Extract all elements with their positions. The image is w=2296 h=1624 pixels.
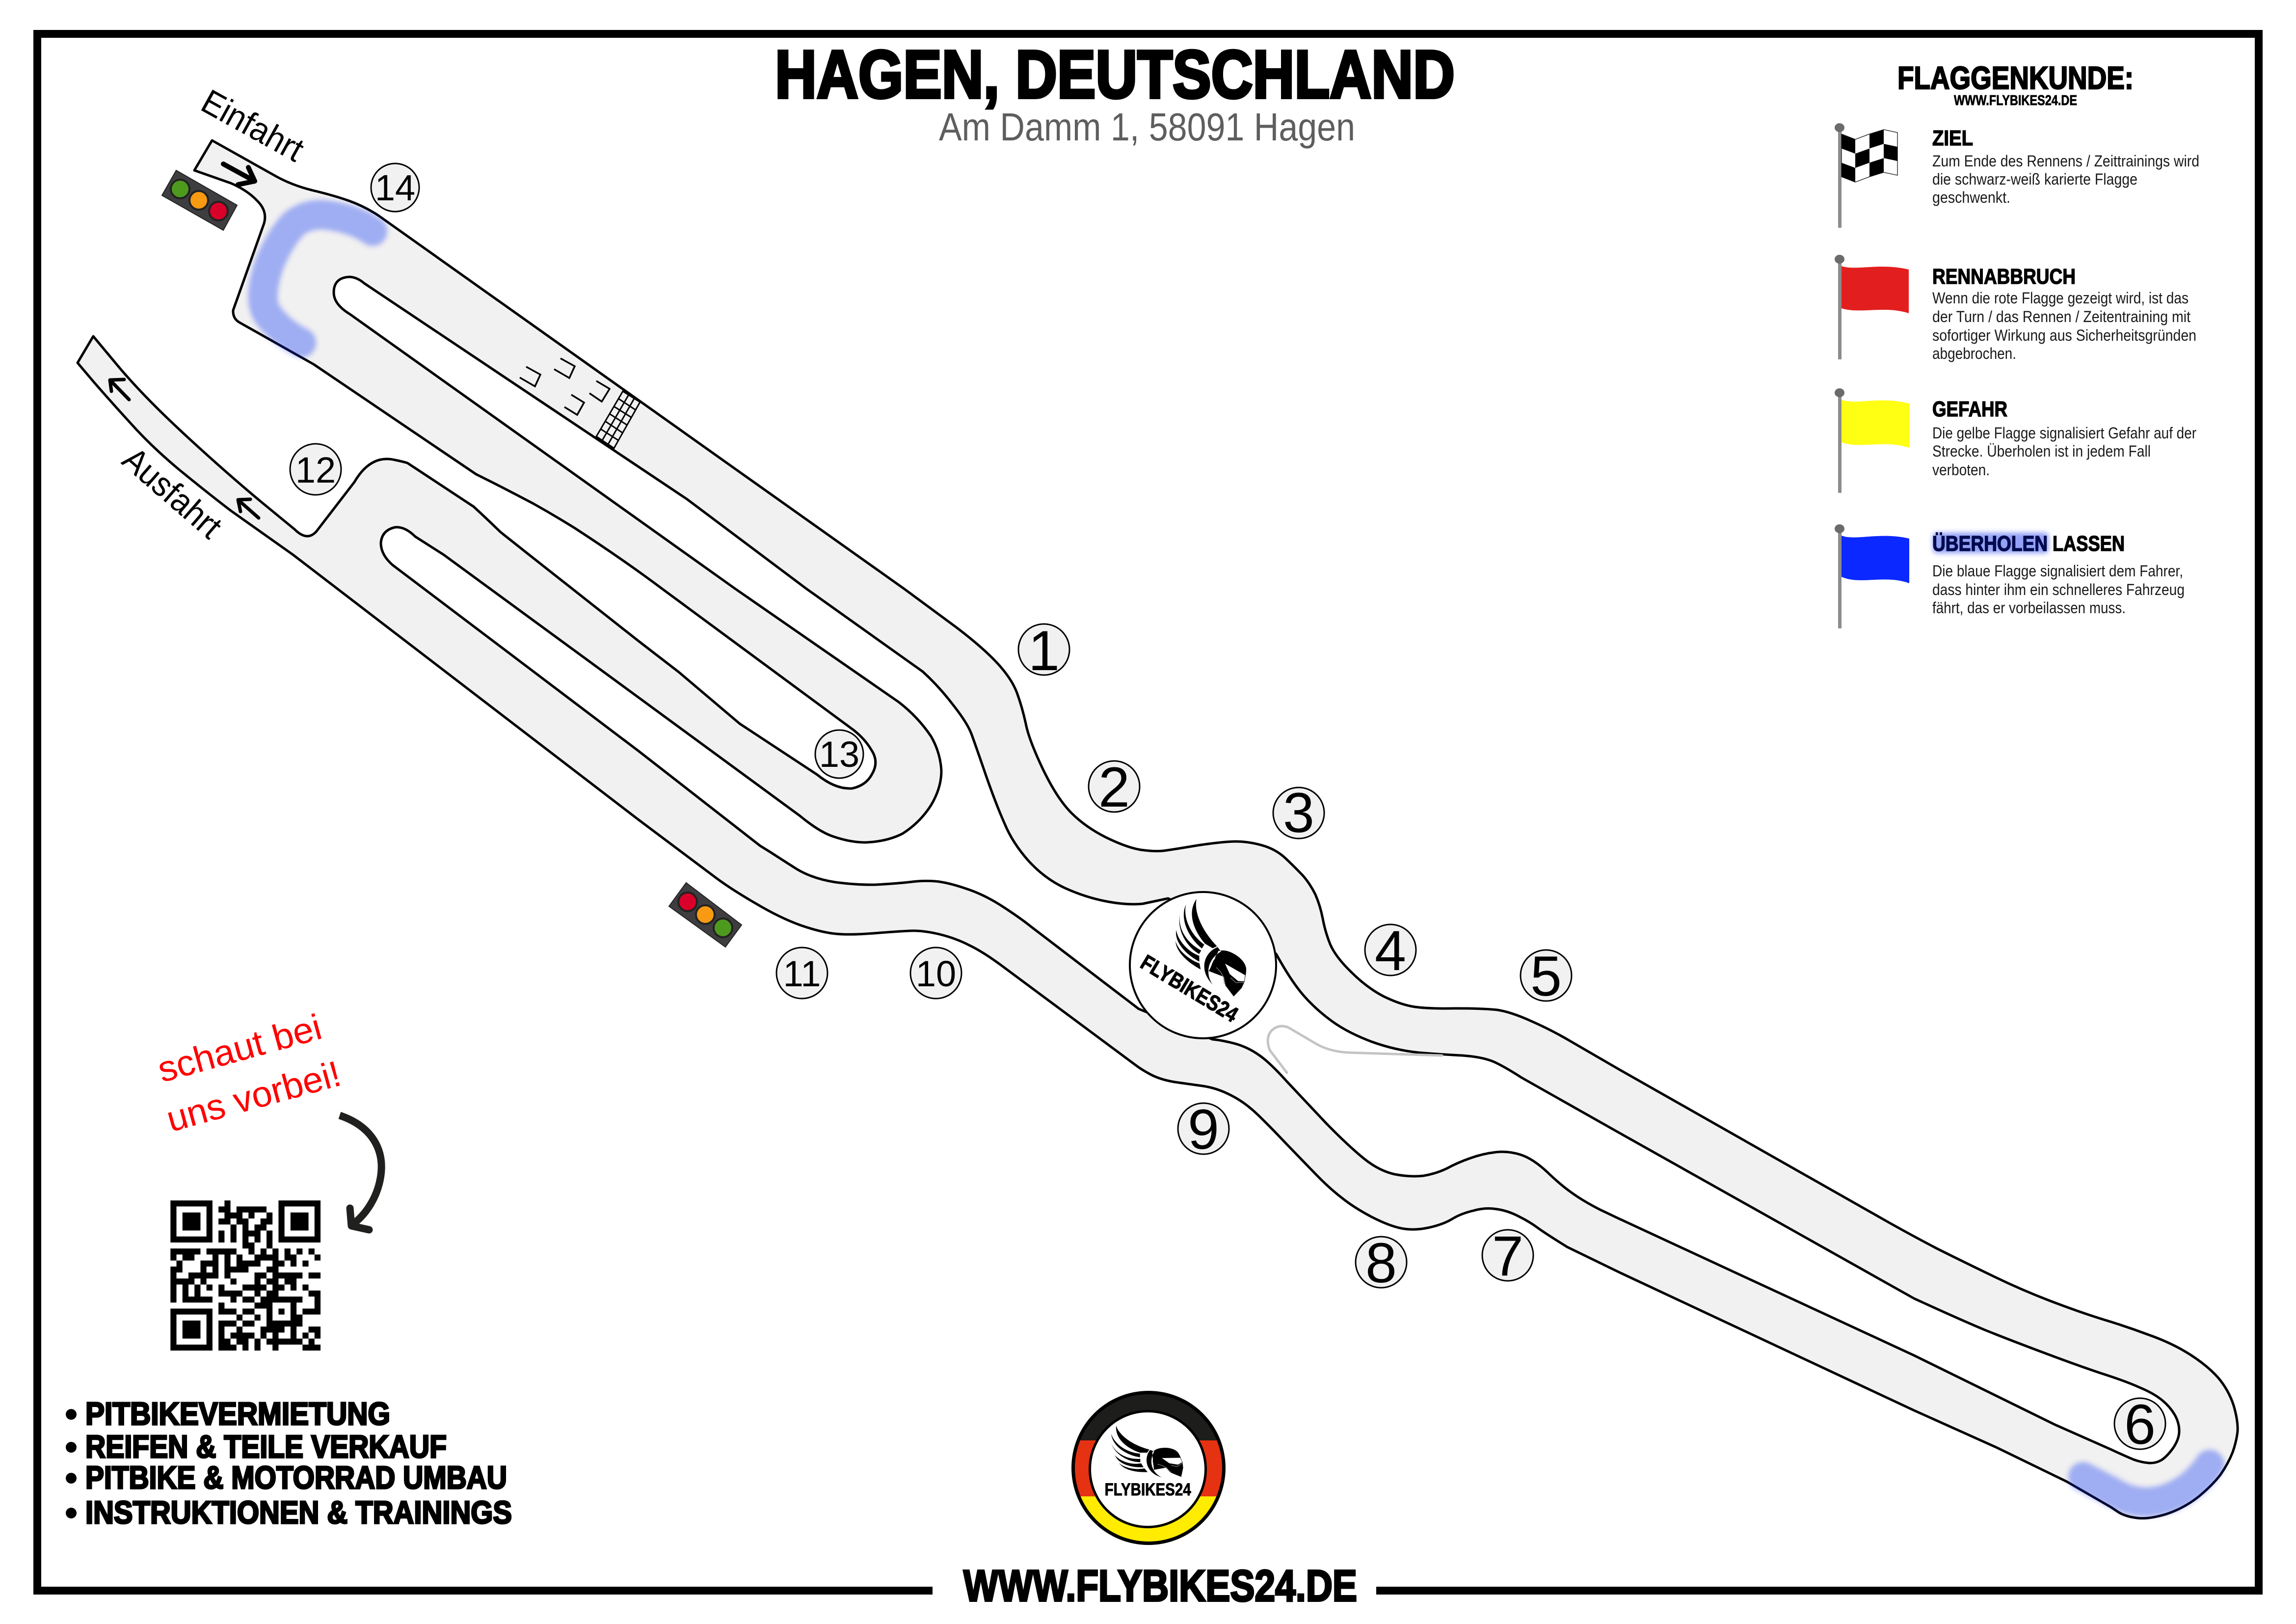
- callout: schaut bei uns vorbei: schaut bei: [153, 1006, 326, 1090]
- logo on track: FLYBIKES24: [1137, 950, 1242, 1027]
- text block: Rennabbruch: Wenn die rote Flagge gezeigt wird, ist das: [1932, 289, 2189, 307]
- services list: [66, 1396, 512, 1530]
- text block: Rennabbruch: RENNABBRUCH: [1932, 265, 2076, 289]
- address subtitle: Am Damm 1, 58091 Hagen: [939, 105, 1355, 149]
- text block: Gefahr: [1932, 397, 2196, 479]
- turn 1: 1: [1028, 620, 1060, 682]
- icon: checkered flag: [1835, 123, 1897, 228]
- turn 8: [1356, 1232, 1407, 1295]
- icon: traffic light exit: [669, 883, 742, 947]
- text block: Überholen lassen: Die blaue Flagge signalisiert dem Fahrer,: [1932, 562, 2183, 580]
- turn 3: [1273, 782, 1324, 844]
- text block: Rennabbruch: der Turn / das Rennen / Zeitentraining mit: [1932, 308, 2190, 325]
- text block: Gefahr: GEFAHR: [1932, 397, 2007, 421]
- starting grid boxes: [520, 358, 610, 415]
- text block: Ziel: geschwenkt.: [1932, 189, 2010, 206]
- turn 5: [1521, 945, 1572, 1008]
- text block: Ziel: die schwarz-weiß karierte Flagge: [1932, 170, 2137, 188]
- turn 11: 11: [783, 953, 821, 994]
- turn 5: 5: [1530, 945, 1562, 1008]
- text block: Überholen lassen: ÜBERHOLEN: [1932, 532, 2048, 556]
- blue highlight: hairpin 6: [2083, 1464, 2210, 1502]
- label: Ausfahrt: Ausfahrt: [115, 439, 229, 546]
- text block: Rennabbruch: [1932, 265, 2196, 362]
- QR code: [170, 1200, 320, 1351]
- callout: schaut bei uns vorbei: uns vorbei!: [162, 1053, 345, 1139]
- services list: PITBIKE & MOTORRAD UMBAU: [85, 1460, 507, 1495]
- text block: Ziel: Zum Ende des Rennens / Zeittrainings wird: [1932, 152, 2199, 170]
- turn 12: [290, 444, 341, 495]
- turn 2: 2: [1098, 756, 1130, 819]
- icon: traffic light entry: [162, 170, 237, 230]
- text block: Überholen lassen: fährt, das er vorbeilassen muss.: [1932, 599, 2126, 617]
- text block: Überholen lassen: dass hinter ihm ein schnelleres Fahrzeug: [1932, 581, 2185, 598]
- panel: Flaggenkunde legend: [1835, 60, 2199, 628]
- turn 4: [1365, 920, 1416, 982]
- arrow: exit direction lower: [238, 499, 259, 518]
- turn 2: [1089, 756, 1140, 819]
- icon: yellow flag: [1835, 388, 1909, 493]
- turn 10: 10: [916, 953, 956, 994]
- logo: Flybikes24 with German flag ring: FLYBIKES24: [1105, 1480, 1191, 1499]
- text block: Überholen lassen: [1932, 532, 2185, 617]
- turn 1: [1018, 620, 1069, 682]
- services list: INSTRUKTIONEN & TRAININGS: [85, 1494, 512, 1530]
- turn 11: [776, 947, 828, 999]
- text block: Gefahr: Strecke. Überholen ist in jedem Fall: [1932, 442, 2151, 460]
- turn 10: [910, 947, 961, 999]
- start finish line: [596, 391, 640, 448]
- turn 12: 12: [295, 450, 336, 490]
- turn 9: [1178, 1098, 1229, 1161]
- turn 8: 8: [1365, 1232, 1397, 1295]
- legend heading: FLAGGENKUNDE:: [1897, 60, 2134, 96]
- turn 3: 3: [1283, 782, 1314, 844]
- icon: blue flag: [1835, 524, 1909, 628]
- turn markers: [290, 163, 2165, 1456]
- turn 9: 9: [1188, 1098, 1219, 1161]
- logo on track: [1130, 892, 1278, 1038]
- website url: WWW.FLYBIKES24.DE: [963, 1562, 1357, 1611]
- logo: Flybikes24 with German flag ring: [1071, 1391, 1226, 1545]
- race track outline: [78, 140, 2238, 1518]
- arrow: curved to QR code: [340, 1115, 381, 1230]
- turn 6: [2114, 1393, 2165, 1456]
- turn 4: 4: [1375, 920, 1406, 982]
- legend url: WWW.FLYBIKES24.DE: [1954, 93, 2077, 108]
- text block: Ziel: [1932, 126, 2199, 206]
- text block: Rennabbruch: sofortiger Wirkung aus Sicherheitsgründen: [1932, 326, 2196, 344]
- arrow: exit direction upper: [110, 379, 129, 400]
- turn 13: 13: [819, 734, 859, 775]
- text block: Ziel: ZIEL: [1932, 126, 1973, 150]
- services list: PITBIKEVERMIETUNG: [85, 1396, 390, 1432]
- services list: REIFEN & TEILE VERKAUF: [85, 1429, 447, 1464]
- text block: Rennabbruch: abgebrochen.: [1932, 345, 2016, 362]
- turn 7: [1482, 1225, 1533, 1288]
- turn 14: 14: [375, 167, 415, 208]
- text block: Gefahr: Die gelbe Flagge signalisiert Gefahr auf der: [1932, 424, 2196, 442]
- callout: schaut bei uns vorbei: [153, 1006, 345, 1139]
- label: Einfahrt: Einfahrt: [195, 82, 310, 169]
- arrow: entry direction: [223, 164, 255, 185]
- turn 6: 6: [2124, 1393, 2156, 1456]
- text block: Gefahr: verboten.: [1932, 461, 1990, 479]
- text block: Überholen lassen: LASSEN: [2053, 532, 2125, 556]
- alternative track line: [1268, 1026, 1442, 1073]
- blue highlight: entry corner: [263, 215, 373, 343]
- title: HAGEN, DEUTSCHLAND: [775, 37, 1455, 112]
- turn 7: 7: [1492, 1225, 1523, 1288]
- icon: red flag: [1835, 255, 1909, 359]
